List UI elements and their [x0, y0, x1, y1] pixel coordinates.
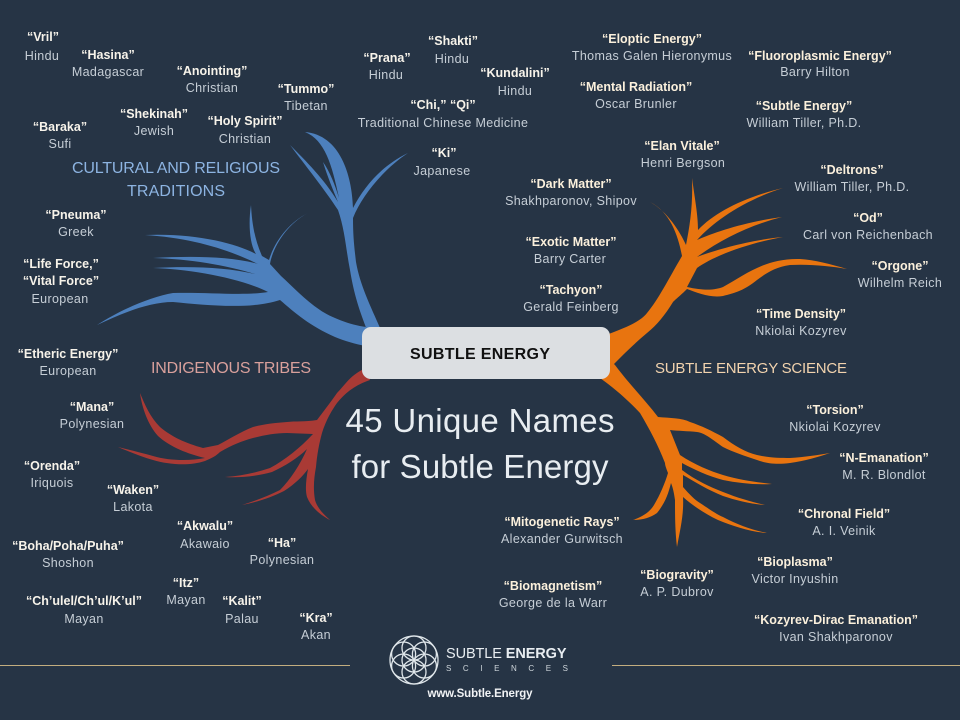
label: Akwalu: “Akwalu”: [177, 519, 233, 533]
label: Kundalini: [480, 66, 550, 98]
label: Ha: Polynesian: [250, 553, 314, 567]
label: Torsion: “Torsion”: [806, 403, 864, 417]
label: Ch'ulel: [26, 594, 142, 626]
label: Orenda: “Orenda”: [24, 459, 80, 473]
label: Chi, Qi: Traditional Chinese Medicine: [358, 116, 528, 130]
footer line left: [0, 665, 350, 666]
label: Vril: “Vril”: [27, 30, 59, 44]
label: Deltrons: [794, 163, 910, 194]
label: Dark Matter: Shakhparonov, Shipov: [505, 194, 637, 208]
label: Exotic Matter: [526, 235, 616, 266]
label: Dark Matter: [505, 177, 637, 208]
label: Chi, Qi: “Chi,” “Qi”: [410, 98, 476, 112]
orange branches: subtle energy science upper: [606, 178, 847, 372]
label: Tummo: Tibetan: [284, 99, 328, 113]
label: Deltrons: “Deltrons”: [820, 163, 884, 177]
heading: cultural and religious traditions: TRADITIONS: [127, 183, 225, 200]
label: Kozyrev-Dirac Emanation: Ivan Shakhparonov: [779, 630, 893, 644]
label: Elan Vitale: [641, 139, 725, 170]
label: Ch'ulel: Mayan: [64, 612, 104, 626]
label: Etheric Energy: [18, 347, 118, 378]
label: Time Density: “Time Density”: [756, 307, 846, 321]
label: Pneuma: [45, 208, 107, 239]
central box: subtle energy: SUBTLE ENERGY: [410, 346, 550, 363]
label: Kundalini: Hindu: [498, 84, 532, 98]
label: Chronal Field: A. I. Veinik: [812, 524, 876, 538]
label: Od: Carl von Reichenbach: [803, 228, 933, 242]
label: Anointing: [177, 64, 247, 95]
label: Ha: [250, 536, 314, 567]
label: Pneuma: “Pneuma”: [45, 208, 107, 222]
label: Akwalu: Akawaio: [180, 537, 230, 551]
label: Ki: “Ki”: [432, 146, 456, 160]
label: Ki: Japanese: [413, 164, 471, 178]
label: Mana: Polynesian: [60, 417, 124, 431]
label: Biogravity: [640, 568, 714, 599]
label: Biomagnetism: [499, 579, 607, 610]
label: Exotic Matter: Barry Carter: [534, 252, 606, 266]
label: Vril: [25, 30, 59, 63]
label: Kalit: Palau: [225, 612, 259, 626]
label: Elan Vitale: Henri Bergson: [641, 156, 725, 170]
label: Life Force, Vital Force: “Vital Force”: [23, 274, 99, 288]
label: Baraka: “Baraka”: [33, 120, 87, 134]
label: Waken: [107, 483, 159, 514]
label: Ch'ulel: “Ch’ulel/Ch’ul/K’ul”: [26, 594, 142, 608]
label: Hasina: [72, 48, 144, 79]
label: Itz: [166, 576, 206, 607]
label: Prana: “Prana”: [363, 51, 411, 65]
label: Kra: Akan: [301, 628, 331, 642]
website url: www.Subtle.Energy: [426, 688, 533, 700]
title: 45 Unique Names: [346, 402, 614, 439]
title: [346, 402, 614, 485]
label: Fluoroplasmic Energy: Barry Hilton: [780, 65, 850, 79]
label: Kundalini: “Kundalini”: [480, 66, 550, 80]
heading: cultural and religious traditions: CULTURAL AND RELIGIOUS: [72, 160, 280, 177]
label: Mitogenetic Rays: [501, 515, 623, 546]
label: Eloptic Energy: Thomas Galen Hieronymus: [572, 49, 732, 63]
label: N-Emanation: [839, 451, 929, 482]
label: Ha: “Ha”: [268, 536, 296, 550]
label: Tummo: [278, 82, 334, 113]
label: Life Force, Vital Force: [23, 257, 99, 306]
label: Pneuma: Greek: [58, 225, 94, 239]
label: Kozyrev-Dirac Emanation: [754, 613, 918, 644]
label: Time Density: Nkiolai Kozyrev: [755, 324, 847, 338]
label: Torsion: Nkiolai Kozyrev: [789, 420, 881, 434]
label: Kalit: “Kalit”: [222, 594, 262, 608]
label: Tachyon: [523, 283, 619, 314]
logo text: SUBTLE ENERGY: [446, 646, 567, 662]
label: Anointing: “Anointing”: [177, 64, 247, 78]
label: Subtle Energy: William Tiller, Ph.D.: [746, 116, 862, 130]
label: Waken: Lakota: [113, 500, 153, 514]
label: Shekinah: [120, 107, 188, 138]
label: Waken: “Waken”: [107, 483, 159, 497]
label: Baraka: Sufi: [49, 137, 71, 151]
label: Bioplasma: Victor Inyushin: [751, 572, 839, 586]
label: Mental Radiation: Oscar Brunler: [595, 97, 677, 111]
heading: subtle energy science: SUBTLE ENERGY SCIENCE: [655, 360, 847, 377]
label: Subtle Energy: “Subtle Energy”: [756, 99, 852, 113]
label: Biomagnetism: “Biomagnetism”: [504, 579, 602, 593]
label: Life Force, Vital Force: “Life Force,”: [23, 257, 99, 271]
label: Exotic Matter: “Exotic Matter”: [526, 235, 616, 249]
label: Boha/Poha/Puha: “Boha/Poha/Puha”: [12, 539, 124, 553]
label: Prana: Hindu: [369, 68, 403, 82]
label: Holy Spirit: Christian: [219, 132, 271, 146]
label: Biogravity: “Biogravity”: [640, 568, 714, 582]
label: Mana: “Mana”: [70, 400, 114, 414]
label: Itz: “Itz”: [173, 576, 199, 590]
label: Deltrons: William Tiller, Ph.D.: [794, 180, 910, 194]
label: Orenda: [24, 459, 80, 490]
logo text: SCIENCES: [446, 664, 568, 673]
label: Life Force, Vital Force: European: [31, 292, 89, 306]
label: Holy Spirit: “Holy Spirit”: [207, 114, 283, 128]
label: Biogravity: A. P. Dubrov: [640, 585, 714, 599]
label: Boha/Poha/Puha: Shoshon: [42, 556, 94, 570]
label: Holy Spirit: [207, 114, 283, 146]
label: Hasina: Madagascar: [72, 65, 144, 79]
label: Anointing: Christian: [186, 81, 238, 95]
label: Kra: “Kra”: [299, 611, 333, 625]
label: Etheric Energy: European: [39, 364, 97, 378]
orange branches: subtle energy science lower: [596, 360, 830, 547]
label: Mitogenetic Rays: “Mitogenetic Rays”: [504, 515, 620, 529]
label: Tachyon: “Tachyon”: [540, 283, 602, 297]
label: Chronal Field: “Chronal Field”: [798, 507, 890, 521]
label: Hasina: “Hasina”: [81, 48, 135, 62]
logo: flower of life: [390, 636, 438, 684]
central box: subtle energy: [362, 327, 610, 379]
footer line right: [612, 665, 960, 666]
label: Kalit: [222, 594, 262, 626]
label: Orgone: Wilhelm Reich: [858, 276, 942, 290]
label: Boha/Poha/Puha: [12, 539, 124, 570]
label: Chronal Field: [798, 507, 890, 538]
label: Mental Radiation: [580, 80, 692, 111]
label: Shekinah: “Shekinah”: [120, 107, 188, 121]
label: Ki: [413, 146, 471, 178]
label: Orgone: [858, 259, 942, 290]
label: N-Emanation: “N-Emanation”: [839, 451, 929, 465]
label: Chi, Qi: [358, 98, 528, 130]
label: Elan Vitale: “Elan Vitale”: [644, 139, 720, 153]
label: Prana: [363, 51, 411, 82]
heading: cultural and religious traditions: [72, 160, 280, 200]
label: Mental Radiation: “Mental Radiation”: [580, 80, 692, 94]
label: Tachyon: Gerald Feinberg: [523, 300, 619, 314]
label: Bioplasma: “Bioplasma”: [757, 555, 833, 569]
label: Tummo: “Tummo”: [278, 82, 334, 96]
label: Mitogenetic Rays: Alexander Gurwitsch: [501, 532, 623, 546]
label: N-Emanation: M. R. Blondlot: [842, 468, 926, 482]
label: Orenda: Iriquois: [30, 476, 74, 490]
logo text: [446, 646, 568, 673]
red branches: indigenous tribes: [118, 368, 370, 520]
label: Baraka: [33, 120, 87, 151]
label: Od: “Od”: [853, 211, 883, 225]
label: Shakti: [428, 34, 478, 66]
label: Akwalu: [177, 519, 233, 551]
label: Eloptic Energy: [572, 32, 732, 63]
label: Mana: [60, 400, 124, 431]
label: Orgone: “Orgone”: [872, 259, 928, 273]
label: Fluoroplasmic Energy: [748, 49, 892, 79]
label: Time Density: [755, 307, 847, 338]
heading: indigenous tribes: INDIGENOUS TRIBES: [151, 360, 311, 377]
label: Bioplasma: [751, 555, 839, 586]
label: Dark Matter: “Dark Matter”: [530, 177, 612, 191]
label: Shakti: “Shakti”: [428, 34, 478, 48]
label: Itz: Mayan: [166, 593, 206, 607]
label: Vril: Hindu: [25, 49, 59, 63]
label: Subtle Energy: [746, 99, 862, 130]
label: Fluoroplasmic Energy: “Fluoroplasmic Energy”: [748, 49, 892, 63]
label: Shakti: Hindu: [435, 52, 469, 66]
label: Torsion: [789, 403, 881, 434]
label: Biomagnetism: George de la Warr: [499, 596, 607, 610]
title: for Subtle Energy: [352, 448, 609, 485]
label: Kra: [299, 611, 333, 642]
label: Eloptic Energy: “Eloptic Energy”: [602, 32, 702, 46]
label: Etheric Energy: “Etheric Energy”: [18, 347, 118, 361]
label: Kozyrev-Dirac Emanation: “Kozyrev-Dirac Emanation”: [754, 613, 918, 627]
blue branches: cultural and religious traditions: [97, 132, 408, 346]
label: Shekinah: Jewish: [134, 124, 174, 138]
label: Od: [803, 211, 933, 242]
